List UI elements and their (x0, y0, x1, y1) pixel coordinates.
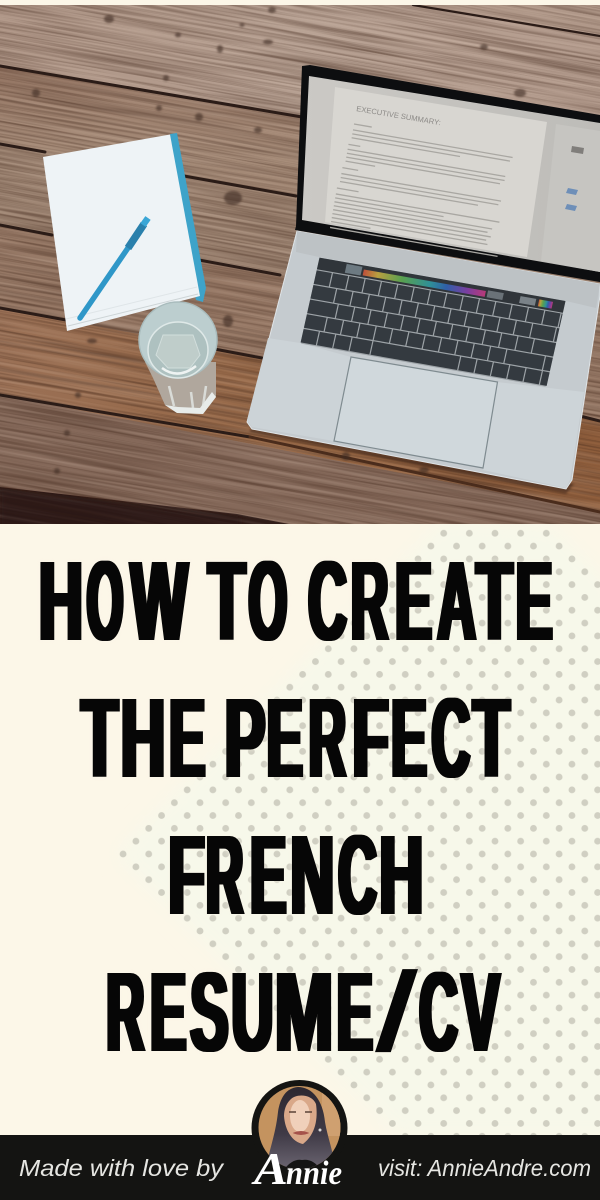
title line 2: E (169, 675, 205, 801)
laptop (247, 65, 600, 494)
title line 4: V (462, 949, 500, 1075)
title line 2: C (432, 675, 470, 801)
wood planks (0, 0, 600, 530)
title (39, 538, 553, 1075)
signature: A (251, 1143, 288, 1194)
dotted halftone background (117, 520, 600, 1136)
title line 3: E (250, 812, 286, 938)
touch bar colour slider (363, 269, 486, 297)
title line 2: T (473, 675, 510, 801)
notebook page (43, 134, 200, 331)
trackpad (334, 357, 498, 468)
footer text left: Made with love by (19, 1155, 225, 1181)
document page (325, 87, 547, 257)
laptop lid and screen (295, 65, 600, 282)
title line 1: E (395, 538, 432, 664)
water glass (139, 302, 217, 414)
footer bar (0, 1135, 600, 1200)
title line 4: M (275, 949, 333, 1075)
right sidebar panel (578, 128, 600, 272)
title line 2: H (121, 675, 165, 801)
eyes and lips (289, 1111, 312, 1113)
notebook blue cover edge (170, 133, 206, 302)
title line 4: S (190, 949, 228, 1075)
title line 1: O (87, 538, 123, 664)
title line 3: C (338, 812, 377, 938)
document heading: EXECUTIVE SUMMARY: (356, 104, 442, 127)
title line 1: T (208, 538, 245, 664)
key rows (302, 277, 561, 379)
title line 1: R (351, 538, 388, 664)
black top (286, 1160, 317, 1169)
title line 4: C (419, 949, 458, 1075)
title line 2: E (391, 675, 427, 801)
title line 1: H (39, 538, 83, 664)
plank gaps (0, 5, 600, 512)
face (284, 1095, 317, 1144)
title line 4: E (337, 949, 373, 1075)
title line 1: O (249, 538, 287, 664)
touch bar (317, 258, 566, 313)
poster canvas: E (516, 538, 553, 664)
title line 2: T (81, 675, 118, 801)
document body lines (330, 123, 516, 256)
water surface (148, 322, 208, 378)
laptop shadow (250, 422, 574, 494)
title line 2: R (309, 675, 346, 801)
title line 2: E (267, 675, 303, 801)
black bezel (295, 65, 600, 282)
title line 1: C (308, 538, 347, 664)
palm rest sections (247, 338, 270, 421)
title line 1: A (438, 538, 476, 664)
title line 4: / (378, 949, 416, 1075)
wood knots (32, 7, 526, 474)
title line 3: F (168, 812, 205, 938)
title line 4: U (232, 949, 273, 1075)
wood grain texture (0, 5, 600, 524)
title line 3: N (290, 812, 334, 938)
title line 3: R (206, 812, 243, 938)
author portrait (252, 1080, 348, 1169)
title line 2: P (225, 675, 265, 801)
title line 1: T (476, 538, 513, 664)
blue pen (80, 218, 148, 318)
title line 3: H (379, 812, 423, 938)
hair (268, 1087, 334, 1172)
bench shadow bottom left (0, 492, 239, 524)
notebook (43, 133, 206, 331)
footer text right: visit: AnnieAndre.com (378, 1155, 591, 1181)
keyboard (300, 258, 566, 387)
signature: nnie (286, 1155, 342, 1192)
laptop base (247, 231, 600, 489)
title line 1: W (131, 538, 188, 664)
panel: desk photo (0, 5, 600, 524)
title line 4: R (106, 949, 144, 1075)
screen surface (302, 76, 600, 272)
title line 4: E (150, 949, 186, 1075)
glass base (145, 362, 216, 414)
glass rim (139, 302, 217, 378)
title line 2: F (352, 675, 389, 801)
